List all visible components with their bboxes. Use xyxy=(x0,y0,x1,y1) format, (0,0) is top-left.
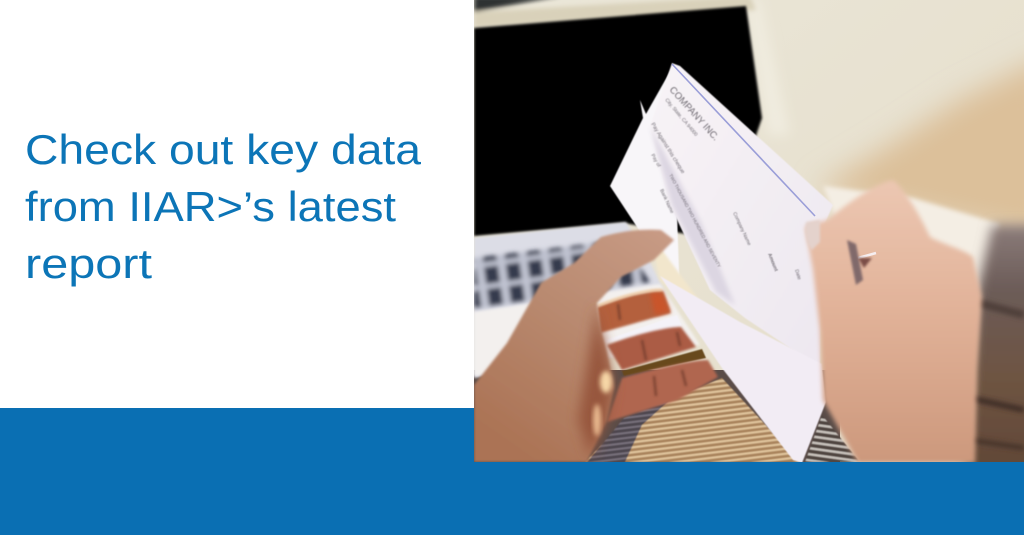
document text: City, State, CA 94000 xyxy=(663,97,699,138)
heading: Check out key data xyxy=(25,126,422,173)
dark gap xyxy=(622,349,706,376)
palm and thumb xyxy=(474,230,674,462)
laptop lid frame xyxy=(754,12,786,132)
document text: Pay Against this cheque xyxy=(649,122,686,175)
laptop screen xyxy=(474,6,762,240)
palm shadow edge xyxy=(578,305,614,458)
wood right edge xyxy=(965,225,1024,480)
white desk surface xyxy=(823,186,1000,290)
document text: Pay of xyxy=(649,153,662,169)
heading: from IIAR>’s latest xyxy=(25,183,396,230)
fingernail xyxy=(805,220,820,250)
wall background xyxy=(474,0,1024,462)
document text: Bank Name xyxy=(658,188,675,215)
document text xyxy=(649,85,802,281)
palm highlights xyxy=(600,371,612,393)
blue rule on document xyxy=(672,64,815,216)
desk wood stripes xyxy=(585,378,860,462)
blue footer band xyxy=(0,408,1024,535)
document text: TWO THOUSAND TWO HUNDRED AND SEVENTY xyxy=(668,173,722,268)
paper shadow xyxy=(652,134,733,302)
left hand xyxy=(474,230,718,462)
document text: Company Name xyxy=(731,211,752,247)
top finger xyxy=(597,291,671,333)
paper strip between fingers xyxy=(858,253,876,258)
document sheet xyxy=(649,63,833,368)
envelope back flap xyxy=(609,70,680,274)
left white panel xyxy=(0,0,474,408)
laptop keyboard deck xyxy=(474,222,700,378)
desk base wood xyxy=(474,370,840,462)
heading: report xyxy=(25,240,152,287)
document text: COMPANY INC. xyxy=(667,85,721,143)
blurred tan desk backdrop xyxy=(815,55,1024,240)
heading xyxy=(25,126,422,287)
envelope interior xyxy=(656,251,692,294)
middle finger xyxy=(607,327,696,370)
knuckle creases xyxy=(618,304,686,396)
finger shadow xyxy=(847,240,863,285)
white gap between fingers xyxy=(610,316,681,341)
lower finger xyxy=(607,360,718,422)
right hand xyxy=(805,180,982,463)
envelope front flap xyxy=(660,276,826,463)
document text: Date xyxy=(793,269,802,281)
document text: Amount xyxy=(766,253,779,273)
photo: hands opening an envelope at a laptop xyxy=(474,0,1024,480)
